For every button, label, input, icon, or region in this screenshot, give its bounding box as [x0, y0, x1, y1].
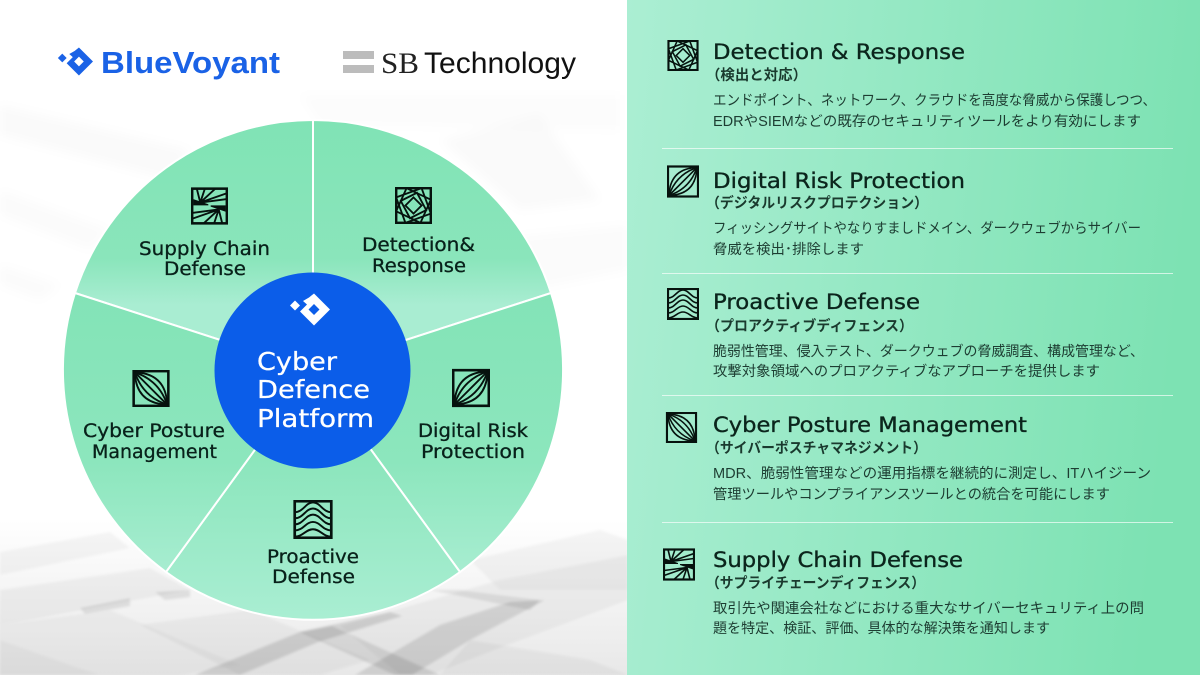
description: 管理ツールやコンプライアンスツールとの統合を可能にします	[713, 486, 1110, 503]
icon: proactive	[295, 501, 331, 538]
hub label	[257, 347, 374, 433]
description	[713, 92, 1156, 130]
label: Detection & Response	[362, 235, 475, 277]
heading: Digital Risk Protection	[713, 169, 965, 194]
description: フィッシングサイトやなりすましドメイン、ダークウェブからサイバー	[713, 219, 1141, 237]
label: Digital Risk Protection: Digital Risk	[418, 421, 528, 442]
subheading: （サプライチェーンディフェンス）	[706, 574, 925, 592]
description: MDR、脆弱性管理などの運用指標を継続的に測定し、ITハイジーン	[713, 464, 1151, 482]
description: 取引先や関連会社などにおける重大なサイバーセキュリティ上の問	[713, 600, 1144, 617]
heading: Cyber Posture Management	[713, 413, 1027, 438]
item: Supply Chain Defense	[664, 548, 1144, 637]
icon: hub mark	[290, 294, 330, 326]
logo: BlueVoyant	[58, 45, 280, 80]
description: 脅威を検出･排除します	[713, 241, 864, 258]
description: 攻撃対象領域へのプロアクティブなアプローチを提供します	[713, 362, 1100, 380]
segment: Digital Risk Protection	[313, 293, 563, 572]
description: エンドポイント、ネットワーク、クラウドを高度な脅威から保護しつつ、	[713, 92, 1156, 109]
description: EDRやSIEMなどの既存のセキュリティツールをより有効にします	[713, 113, 1141, 130]
description	[713, 342, 1144, 380]
subheading: （プロアクティブディフェンス）	[706, 317, 913, 335]
label: Digital Risk Protection	[418, 421, 528, 463]
label: Detection & Response: Response	[372, 256, 466, 277]
icon: supply chain	[664, 550, 694, 580]
center hub: Cyber Defence Platform	[214, 272, 410, 468]
wordmark: BlueVoyant: BlueVoyant	[101, 45, 280, 80]
subheading: （サイバーポスチャマネジメント）	[706, 440, 927, 457]
logo: SB Technology	[343, 47, 576, 80]
label: Cyber Posture Management	[83, 421, 225, 463]
label: Detection & Response: Detection&	[362, 235, 475, 256]
hub label: Platform	[257, 404, 374, 433]
wordmark: SB: SB	[381, 47, 419, 80]
segment: Detection & Response	[313, 120, 551, 370]
label: Cyber Posture Management: Cyber Posture	[83, 421, 225, 442]
hub label: Cyber	[257, 347, 338, 376]
label: Proactive Defense: Proactive	[267, 547, 359, 568]
pie chart: platform capabilities	[63, 120, 563, 620]
description	[713, 464, 1151, 503]
label: Supply Chain Defense: Defense	[164, 259, 246, 280]
item: Digital Risk Protection	[668, 166, 1141, 258]
icon: digital risk	[453, 370, 489, 406]
description: 脆弱性管理、侵入テスト、ダークウェブの脅威調査、構成管理など、	[713, 342, 1144, 360]
icon: cyber posture	[667, 413, 696, 442]
panel: capability descriptions	[627, 0, 1200, 675]
segment: Cyber Posture Management	[63, 293, 313, 572]
wordmark: Technology: Technology	[424, 47, 576, 80]
subheading: （デジタルリスクプロテクション）	[706, 194, 928, 212]
subheading: （検出と対応）	[706, 66, 807, 84]
segment: Supply Chain Defense	[75, 120, 313, 370]
label: Proactive Defense: Defense	[272, 567, 355, 588]
description: 題を特定、検証、評価、具体的な解決策を通知します	[713, 620, 1050, 637]
description	[713, 219, 1141, 258]
segment: Proactive Defense	[166, 370, 460, 620]
icon: proactive	[668, 289, 698, 319]
icon: digital risk	[668, 166, 698, 196]
heading: Supply Chain Defense	[713, 548, 963, 573]
label: Proactive Defense	[267, 547, 359, 588]
background: page white with perspective grid	[0, 0, 628, 675]
hub label: Defence	[257, 375, 370, 404]
description	[713, 600, 1144, 637]
icon: SB bars	[343, 51, 374, 73]
icon: detection	[396, 188, 431, 223]
icon: supply chain	[192, 189, 227, 223]
item: Cyber Posture Management	[667, 413, 1151, 503]
label: Supply Chain Defense	[139, 239, 270, 280]
item: Detection & Response	[668, 40, 1156, 130]
icon: BlueVoyant mark	[58, 47, 93, 76]
heading: Proactive Defense	[713, 290, 920, 315]
item: Proactive Defense	[668, 289, 1144, 380]
label: Supply Chain Defense: Supply Chain	[139, 239, 270, 260]
label: Digital Risk Protection: Protection	[421, 442, 525, 463]
icon: cyber posture	[134, 371, 168, 406]
label: Cyber Posture Management: Management	[92, 442, 217, 463]
heading: Detection & Response	[713, 40, 965, 65]
icon: detection	[668, 41, 698, 70]
